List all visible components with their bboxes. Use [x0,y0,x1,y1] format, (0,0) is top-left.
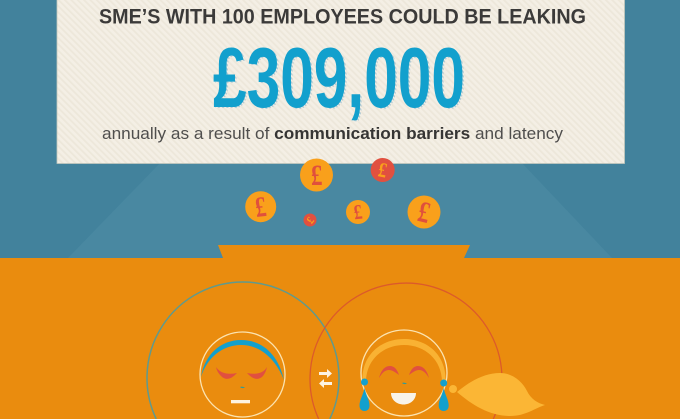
orange ground [0,258,680,419]
card edge [57,0,624,164]
coin 1 [300,158,333,192]
coin 1: £ [311,159,322,192]
left eye [216,367,237,379]
coin 5: £ [353,200,364,224]
coin 6: £ [415,195,434,230]
red ring [310,283,502,419]
coin 4: £ [305,215,317,226]
icon: exchange arrows [319,369,332,388]
mouth [231,400,250,403]
coin 3 [245,191,276,224]
nose [240,387,245,388]
right eye [247,367,267,379]
hair band [201,340,284,380]
left earring [360,378,370,411]
face: right person [360,330,449,416]
coin 6 [408,195,440,230]
nose [402,383,407,384]
teal background [0,0,680,258]
coin 3: £ [254,191,268,224]
coin 2 [371,157,395,183]
face: left person [200,332,285,417]
coin 5 [346,200,370,224]
panel: headline card [57,0,624,164]
subheading: annually as a result of communication barriers and latency [102,124,563,143]
ponytail [449,373,545,416]
right eye [409,366,429,378]
teal ring [147,282,339,419]
right earring [439,380,449,411]
big number: £309,000 [213,31,465,126]
coin 2: £ [376,157,389,183]
coins [245,157,440,230]
big number shadow: £309,000 [214,32,466,127]
funnel tab [218,245,470,258]
hair band [362,339,446,382]
light beam [68,163,612,258]
mouth [391,393,416,404]
heading: SME’S WITH 100 EMPLOYEES COULD BE LEAKING [99,4,586,28]
left eye [379,366,399,378]
